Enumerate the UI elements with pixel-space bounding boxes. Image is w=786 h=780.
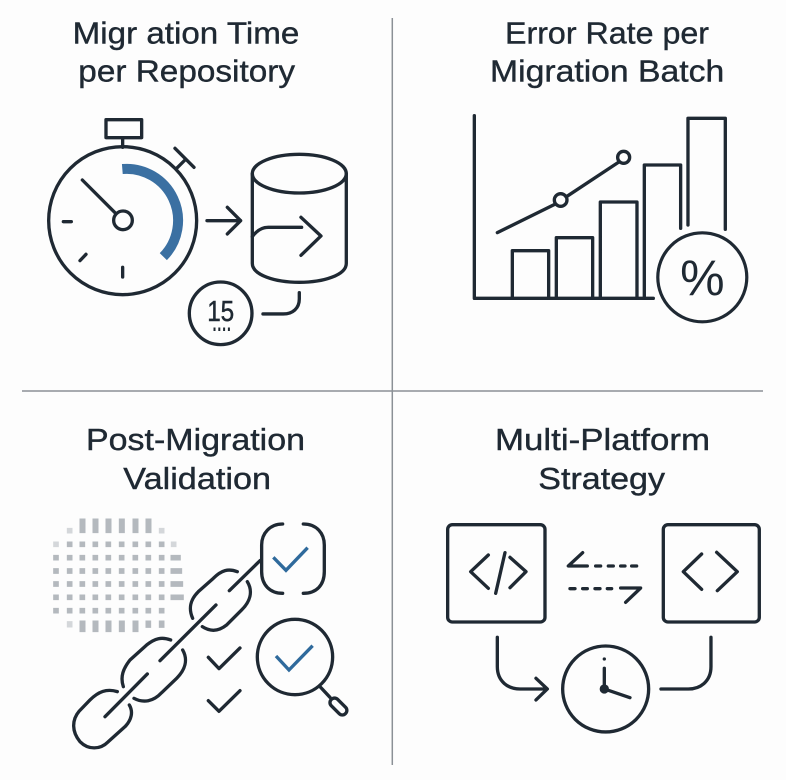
- panel: post-migration validation: [54, 422, 349, 748]
- heading: migration time per repository: per Repository: [78, 54, 296, 88]
- heading: post-migration validation: Post-Migration: [86, 422, 305, 457]
- bar chart: [474, 116, 725, 298]
- trend line: [497, 151, 630, 233]
- icon: checked link: [262, 524, 324, 593]
- panel: migration time per repository: [49, 16, 346, 345]
- panel: error rate per migration batch: [474, 16, 747, 322]
- icon: stopwatch: [49, 120, 197, 295]
- heading: migration time per repository: Migr ation Time: [73, 16, 299, 50]
- icon: code window right: [663, 525, 759, 622]
- heading: multi-platform strategy: [495, 422, 710, 496]
- icon: code window left: [448, 525, 545, 622]
- arrows: dashed two-way sync: [568, 553, 641, 602]
- connector: badge to repository: [263, 293, 299, 314]
- heading: multi-platform strategy: Strategy: [538, 461, 666, 496]
- connector: right window to clock: [661, 637, 711, 689]
- data dot grid: [54, 519, 183, 632]
- badge: 15: 15: [207, 296, 234, 328]
- icon: magnifier with check: [257, 619, 349, 717]
- heading: post-migration validation: Validation: [123, 461, 271, 496]
- heading: error rate per migration batch: Error Rate per: [505, 16, 709, 50]
- heading: error rate per migration batch: [490, 16, 724, 88]
- icon: percent badge: %: [680, 250, 725, 306]
- icon: clock: [563, 646, 649, 732]
- icon: repository cylinder: [252, 154, 346, 282]
- icon: check marks: [208, 648, 240, 711]
- heading: migration time per repository: [73, 16, 299, 88]
- panel: multi-platform strategy: [448, 422, 759, 732]
- arrow: stopwatch to repository: [207, 207, 241, 234]
- heading: post-migration validation: [86, 422, 305, 496]
- icon: chain links: [74, 561, 260, 748]
- heading: error rate per migration batch: Migration Batch: [490, 54, 724, 88]
- icon: percent badge: [658, 233, 747, 322]
- heading: multi-platform strategy: Multi-Platform: [495, 422, 710, 457]
- arrow: left window to clock: [497, 637, 547, 700]
- badge: 15: [189, 282, 252, 345]
